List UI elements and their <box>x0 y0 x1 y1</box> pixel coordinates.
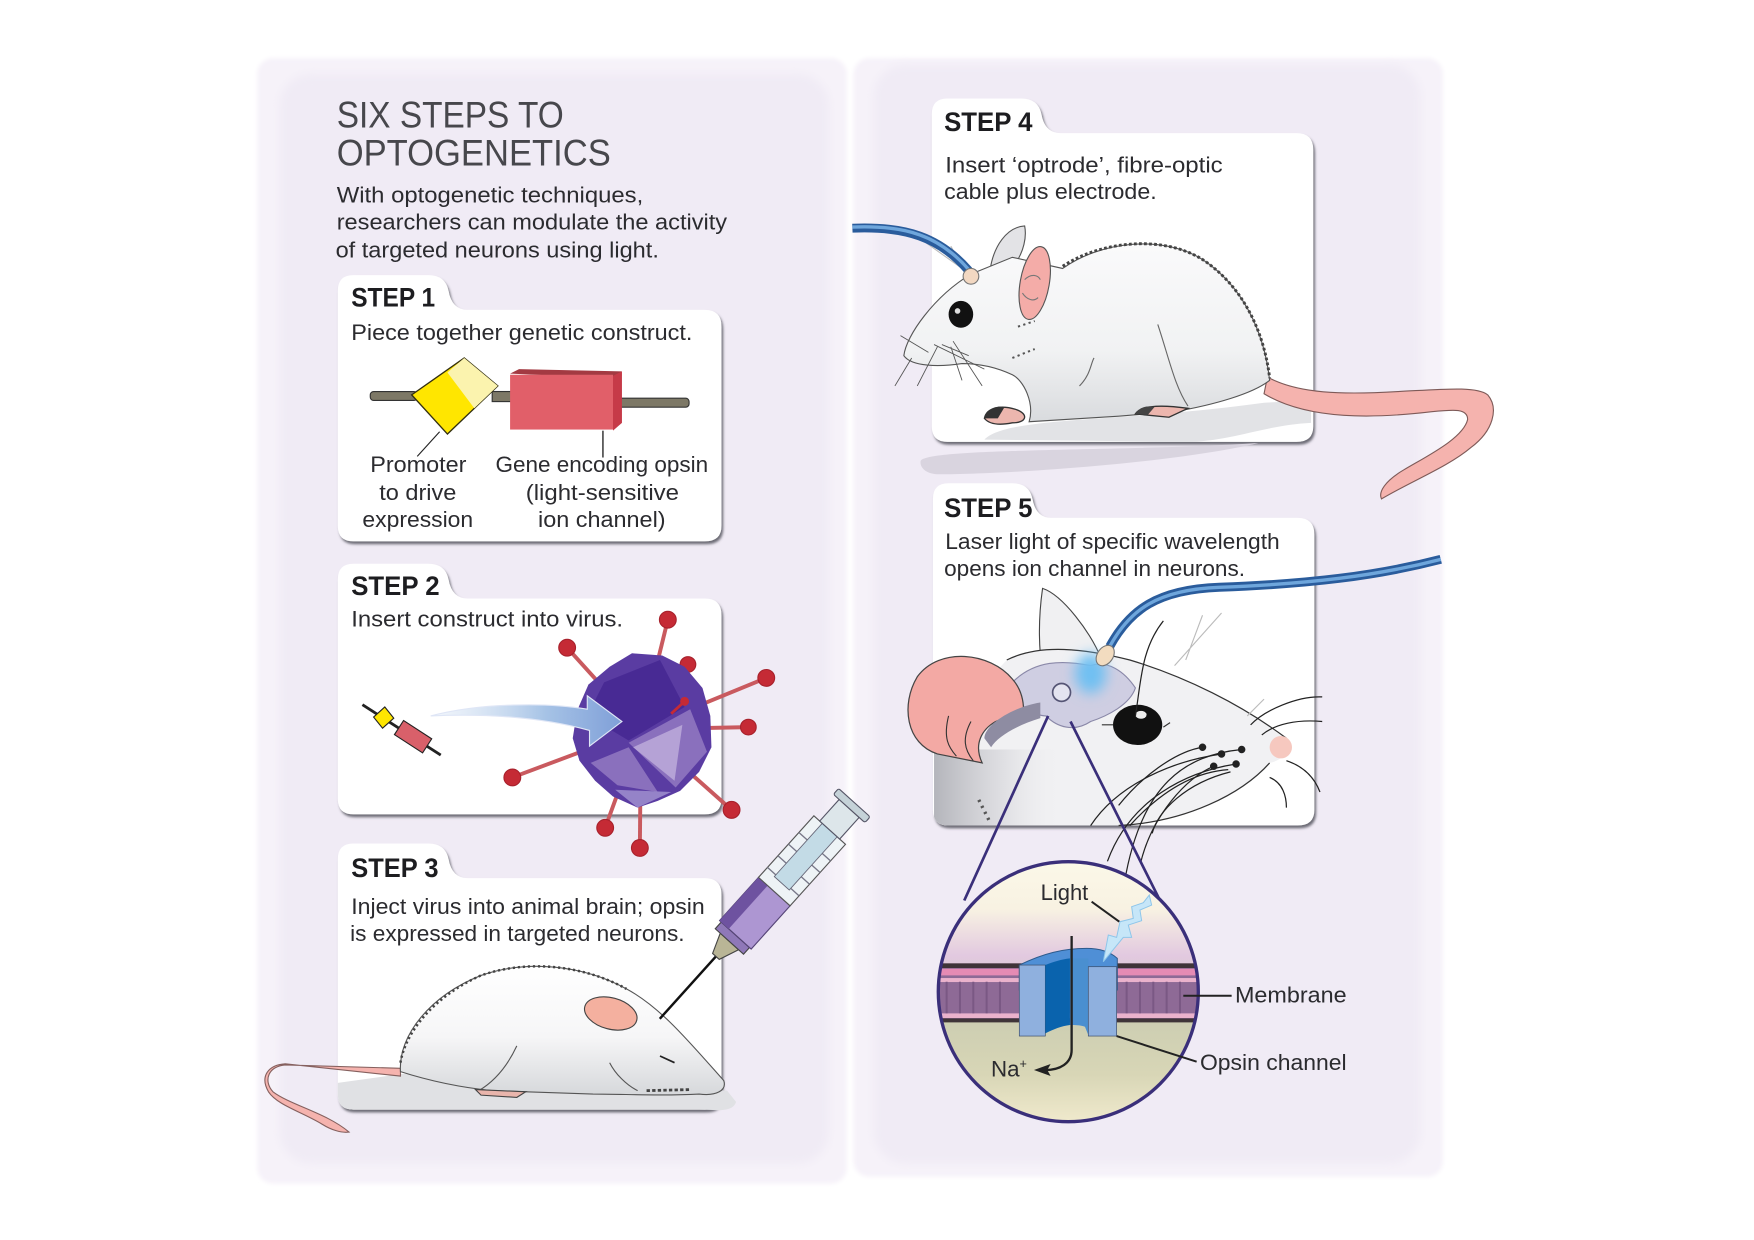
title: OPTOGENETICS <box>337 133 611 174</box>
intro text: With optogenetic techniques, <box>337 182 643 207</box>
label: na+: + <box>1020 1057 1027 1071</box>
panel: step 2: STEP 2 <box>351 571 440 601</box>
label: gene encoding opsin: Gene encoding opsin <box>496 452 708 477</box>
arrow: construct into virus <box>431 696 622 746</box>
panel: step 4: Insert ‘optrode’, fibre-optic <box>945 152 1223 177</box>
tail <box>1264 377 1493 499</box>
label: promoter <box>362 452 473 532</box>
standing mouse <box>895 226 1270 424</box>
title <box>337 95 611 174</box>
ion path arrow <box>1034 936 1072 1076</box>
panel: step 5: opens ion channel in neurons. <box>944 556 1245 581</box>
intro text <box>336 182 728 262</box>
panel: step 1: STEP 1 <box>351 283 435 313</box>
panel: step 3: Inject virus into animal brain; opsin <box>351 894 705 919</box>
label: membrane: Membrane <box>1235 983 1347 1008</box>
sleeping mouse <box>400 966 724 1097</box>
virus <box>504 611 775 856</box>
label: na+: Na <box>991 1057 1020 1082</box>
label: gene encoding opsin: (light-sensitive <box>526 480 679 505</box>
infographic: six steps to optogenetics <box>258 58 1494 1183</box>
exposed brain <box>1012 662 1135 728</box>
ear <box>908 656 1024 763</box>
label: opsin channel <box>1117 1036 1347 1075</box>
panel: step 4: cable plus electrode. <box>944 179 1157 204</box>
mouse shadow <box>984 400 1311 442</box>
title: SIX STEPS TO <box>337 95 564 136</box>
label: gene encoding opsin <box>496 452 708 532</box>
syringe <box>644 788 870 1033</box>
label: promoter: Promoter <box>370 452 467 477</box>
mouse head <box>908 588 1322 884</box>
intro text: of targeted neurons using light. <box>336 237 659 262</box>
panel: step 3: STEP 3 <box>351 853 439 883</box>
label: promoter: to drive <box>379 480 456 505</box>
panel: step 5 <box>908 483 1441 884</box>
callout lines to lens <box>964 716 1166 912</box>
panel: step 1 <box>338 275 722 541</box>
cable: optrode <box>852 227 979 284</box>
label: promoter: expression <box>362 507 473 532</box>
label: gene encoding opsin: ion channel) <box>538 507 666 532</box>
genetic construct diagram <box>370 358 689 458</box>
opsin channel <box>1019 948 1117 1036</box>
whiskers <box>1091 621 1322 884</box>
label: light <box>1041 880 1119 922</box>
label: opsin channel: Opsin channel <box>1200 1050 1347 1075</box>
sleeping mouse shadow <box>338 1074 736 1110</box>
panel: step 5: Laser light of specific wavelength <box>945 529 1280 554</box>
panel: step 3 <box>265 788 870 1132</box>
panel: step 4 <box>852 98 1493 499</box>
panel: step 2: Insert construct into virus. <box>351 606 623 631</box>
label: light: Light <box>1041 880 1089 905</box>
panel: step 5: STEP 5 <box>944 493 1033 523</box>
cable: laser <box>1092 559 1441 669</box>
tail <box>265 1064 400 1132</box>
intro text: researchers can modulate the activity <box>337 209 728 234</box>
light bolt <box>1103 895 1152 962</box>
panel: step 1: Piece together genetic construct. <box>351 320 692 345</box>
lens: opsin channel detail <box>937 862 1347 1122</box>
panel: step 3: is expressed in targeted neurons. <box>350 921 685 946</box>
background panels <box>257 58 1443 1184</box>
membrane <box>937 963 1200 1022</box>
panel: step 4: STEP 4 <box>944 107 1033 137</box>
panel: step 2 <box>338 564 775 856</box>
small construct <box>362 705 441 755</box>
